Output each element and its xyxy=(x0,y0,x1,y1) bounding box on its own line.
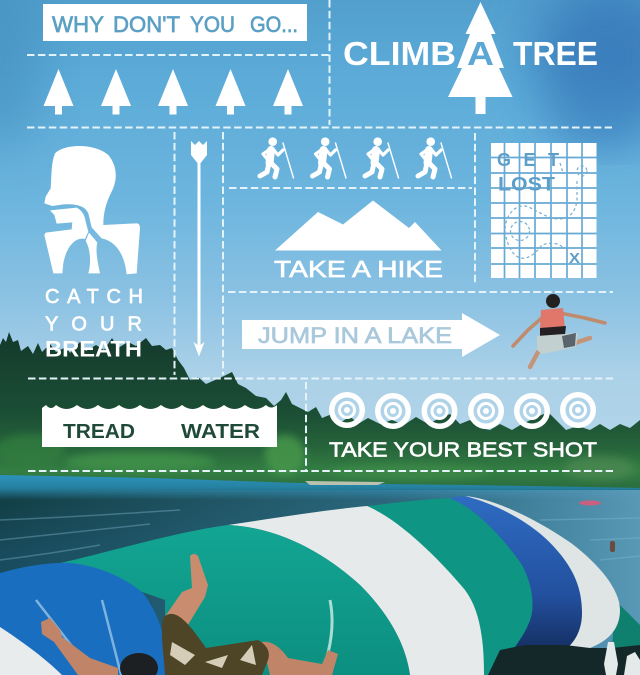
hikers row xyxy=(260,137,452,178)
hiker 4 xyxy=(418,137,452,178)
rear white band xyxy=(465,496,620,660)
target 6 xyxy=(563,395,593,425)
hiker 3 xyxy=(365,137,398,178)
heading text: YOU xyxy=(190,12,235,37)
target 4 xyxy=(471,396,501,426)
tree 1 xyxy=(44,69,74,114)
climb a tree title: TREE xyxy=(513,36,598,73)
sky background xyxy=(0,0,640,500)
arrow: jump in a lake: JUMP IN A LAKE xyxy=(258,323,452,348)
front blue panel xyxy=(0,563,170,675)
man lying on blob xyxy=(41,554,338,675)
tread water box: WATER xyxy=(181,421,261,443)
map: get lost xyxy=(491,143,596,278)
large tree icon xyxy=(448,2,512,114)
hiker 2 xyxy=(312,137,346,178)
catch your breath label: YOUR xyxy=(45,314,142,336)
climb a tree title xyxy=(343,2,598,114)
arrow: jump in a lake xyxy=(242,313,500,357)
inflatable water blob xyxy=(0,496,640,675)
far teal end xyxy=(612,600,640,650)
rear blue band xyxy=(449,496,582,668)
dashed grid lines xyxy=(27,0,613,471)
highlight xyxy=(323,600,332,670)
heading text: WHY xyxy=(52,12,104,37)
treasure trail xyxy=(505,163,587,258)
forest treeline xyxy=(0,332,640,495)
dark underside xyxy=(488,645,640,675)
target 5 xyxy=(517,396,547,426)
map grid xyxy=(491,143,596,278)
tree 5 xyxy=(273,69,303,114)
front white corner xyxy=(0,627,62,675)
target 2 xyxy=(378,396,408,426)
rear teal band xyxy=(367,498,533,675)
icon: vertical arrow xyxy=(191,141,207,356)
tree 4 xyxy=(216,69,246,114)
target 1 xyxy=(332,395,362,425)
heading text xyxy=(52,12,298,37)
climb a tree title: CLIMB xyxy=(343,36,456,73)
map text: LOST xyxy=(498,174,555,196)
climb a tree title: A xyxy=(467,36,494,73)
lake water xyxy=(0,475,640,675)
front white band xyxy=(228,506,484,675)
catch your breath label: BREATH xyxy=(45,336,142,362)
water bottles xyxy=(604,642,640,675)
map text: GET xyxy=(497,150,559,170)
row of small trees xyxy=(44,69,303,114)
targets row xyxy=(332,395,593,426)
boy jumping xyxy=(513,294,605,367)
heading box: why don't you go xyxy=(43,4,307,41)
tread water box: TREAD xyxy=(63,421,135,443)
take a hike label: TAKE A HIKE xyxy=(274,256,443,282)
icon: mountains xyxy=(275,200,442,250)
map text xyxy=(497,150,580,267)
take your best shot label: TAKE YOUR BEST SHOT xyxy=(329,438,598,462)
heading text: DON'T xyxy=(113,12,180,37)
map text: X xyxy=(569,250,580,267)
hiker 1 xyxy=(260,137,294,178)
catch your breath label: CATCH xyxy=(45,286,143,308)
catch your breath label xyxy=(45,286,143,362)
heading text: GO... xyxy=(250,12,298,37)
icon: head and lungs xyxy=(44,146,140,274)
tread water box xyxy=(42,405,277,447)
tree 2 xyxy=(101,69,131,114)
target 3 xyxy=(424,396,455,426)
tree 3 xyxy=(158,69,188,114)
front teal band xyxy=(60,525,410,675)
